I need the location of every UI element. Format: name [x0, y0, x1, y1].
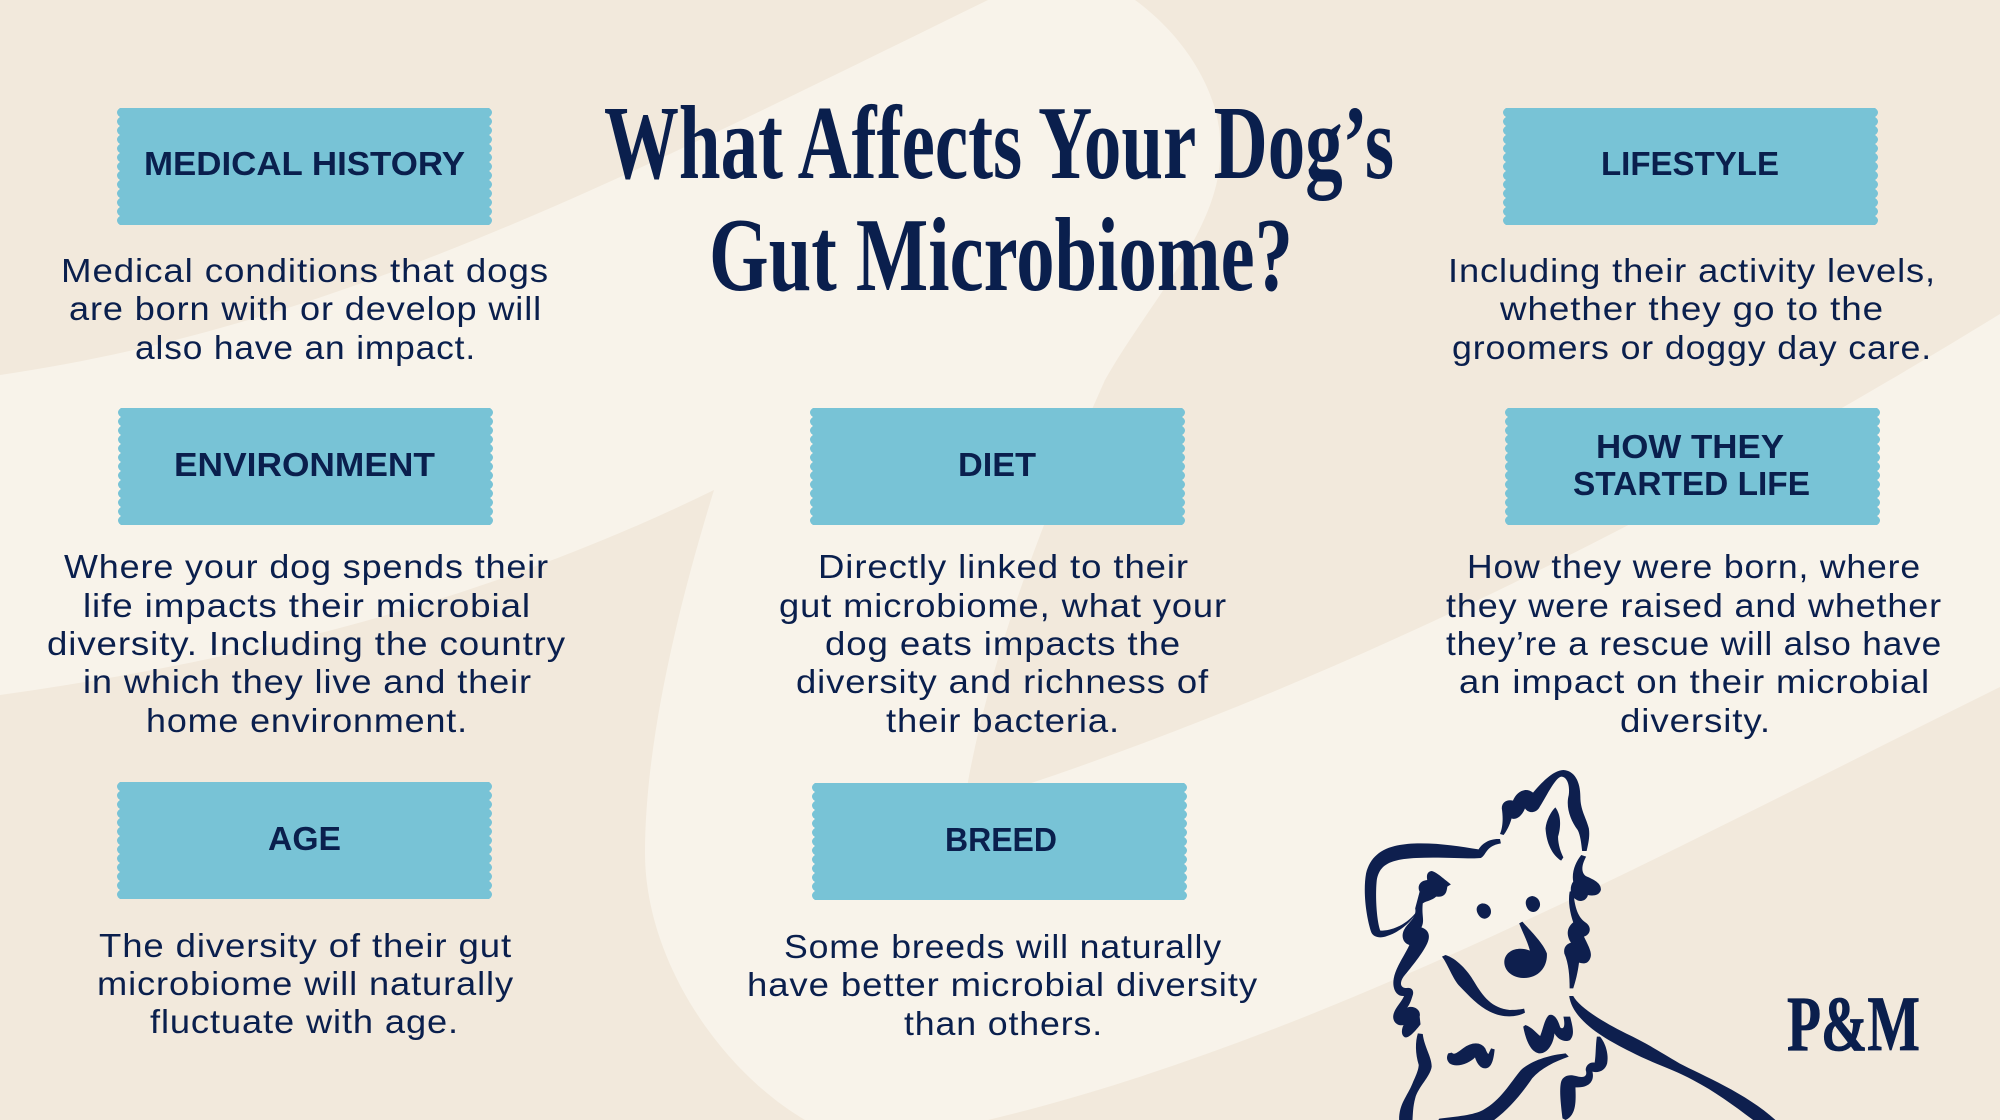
text: age description: microbiome will naturally — [97, 965, 514, 1002]
title: Gut Microbiome? — [709, 196, 1293, 313]
text: how they started life description: they were raised and whether — [1446, 587, 1942, 624]
text: lifestyle description: whether they go to the — [1499, 290, 1884, 327]
ribbon: diet: DIET — [958, 447, 1037, 484]
panel: environment — [47, 408, 566, 739]
title: What Affects Your Dog’s — [604, 84, 1394, 201]
panel: age — [97, 782, 514, 1040]
text: diet description: dog eats impacts the — [825, 625, 1181, 662]
ribbon: lifestyle: LIFESTYLE — [1601, 146, 1779, 183]
icon: dog line illustration — [1365, 770, 1775, 1120]
text: diet description: diversity and richness of — [796, 663, 1209, 700]
text: age description: The diversity of their gut — [99, 927, 512, 964]
text: diet description: Directly linked to their — [818, 548, 1189, 585]
text: how they started life description: they’re a rescue will also have — [1446, 625, 1942, 662]
text: how they started life description: an impact on their microbial — [1459, 663, 1930, 700]
text: diet description: gut microbiome, what your — [779, 587, 1227, 624]
panel: medical history — [61, 108, 549, 366]
text: environment description: home environment. — [146, 702, 468, 739]
ribbon: breed: BREED — [945, 822, 1057, 859]
text: lifestyle description — [1448, 252, 1936, 366]
text: environment description: life impacts their microbial — [83, 587, 531, 624]
text: breed description: Some breeds will naturally — [784, 928, 1222, 965]
ribbon: age — [117, 782, 492, 899]
ribbon: how they started life: STARTED LIFE — [1573, 466, 1810, 503]
text: lifestyle description: groomers or doggy day care. — [1452, 329, 1932, 366]
ribbon: environment: ENVIRONMENT — [174, 447, 436, 484]
panel: breed — [747, 783, 1258, 1042]
ribbon: how they started life: HOW THEY — [1596, 429, 1784, 466]
ribbon: medical history: MEDICAL HISTORY — [144, 146, 465, 183]
text: medical history description — [61, 252, 549, 366]
ribbon: how they started life — [1505, 408, 1880, 525]
title — [604, 84, 1394, 313]
ribbon: lifestyle — [1503, 108, 1878, 225]
text: medical history description: Medical conditions that dogs — [61, 252, 549, 289]
logo: P&M: P&M — [1787, 980, 1920, 1067]
text: breed description: have better microbial diversity — [747, 966, 1258, 1003]
text: how they started life description: diversity. — [1620, 702, 1771, 739]
text: lifestyle description: Including their activity levels, — [1448, 252, 1936, 289]
ribbon: environment — [118, 408, 493, 525]
text: environment description: in which they live and their — [83, 663, 532, 700]
panel: how they started life — [1446, 408, 1942, 739]
text: medical history description: are born with or develop will — [69, 290, 542, 327]
panel: lifestyle — [1448, 108, 1936, 366]
text: breed description: than others. — [904, 1005, 1103, 1042]
text: breed description — [747, 928, 1258, 1042]
text: environment description: diversity. Including the country — [47, 625, 566, 662]
ribbon: medical history — [117, 108, 492, 225]
text: age description — [97, 927, 514, 1040]
text: environment description: Where your dog spends their — [64, 548, 549, 585]
ribbon: breed — [812, 783, 1187, 900]
text: diet description: their bacteria. — [886, 702, 1120, 739]
text: age description: fluctuate with age. — [150, 1003, 459, 1040]
ribbon: diet — [810, 408, 1185, 525]
text: how they started life description — [1446, 548, 1942, 739]
text: diet description — [779, 548, 1227, 739]
ribbon: age: AGE — [268, 821, 341, 858]
text: environment description — [47, 548, 566, 739]
text: medical history description: also have an impact. — [135, 329, 476, 366]
text: how they started life description: How they were born, where — [1467, 548, 1921, 585]
panel: diet — [779, 408, 1227, 739]
